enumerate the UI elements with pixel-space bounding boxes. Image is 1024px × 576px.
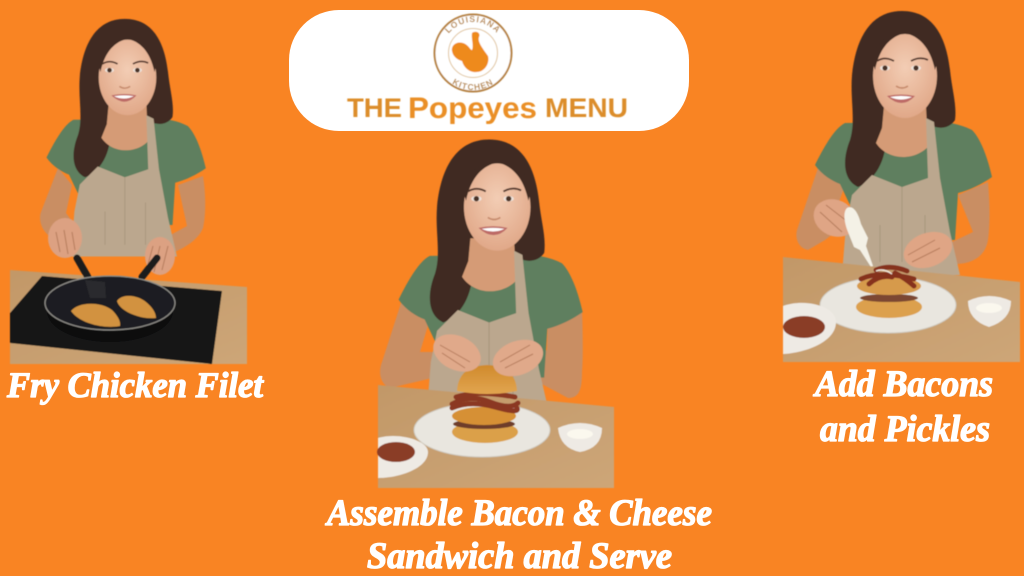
table bbox=[783, 257, 1020, 362]
plate bbox=[414, 403, 550, 457]
induction hob bbox=[10, 276, 222, 364]
logo title: MENU bbox=[545, 93, 628, 123]
burger bbox=[452, 365, 518, 443]
table bbox=[378, 385, 614, 488]
logo badge: KITCHEN bbox=[452, 78, 494, 91]
bacon bowl bbox=[783, 303, 836, 354]
caption: assemble sandwich: Assemble Bacon & Cheese bbox=[325, 493, 712, 534]
logo title: Popeyes bbox=[408, 92, 537, 125]
left arm bbox=[380, 300, 445, 388]
photo: woman frying chicken bbox=[10, 19, 247, 364]
face bbox=[464, 162, 530, 251]
left arm bbox=[796, 168, 845, 250]
sauce bowl bbox=[558, 423, 602, 452]
utensil handles bbox=[77, 258, 157, 293]
left arm bbox=[40, 168, 75, 250]
face bbox=[99, 39, 156, 115]
logo badge: LOUISIANA bbox=[444, 15, 500, 34]
torso and apron bbox=[399, 139, 583, 414]
hands bbox=[427, 327, 548, 383]
spatula bbox=[85, 280, 106, 298]
logo title bbox=[347, 92, 628, 125]
bacon bowl bbox=[377, 436, 428, 478]
caption: add bacons and pickles bbox=[813, 364, 993, 450]
logo panel bbox=[289, 10, 689, 131]
worktop bbox=[10, 270, 247, 364]
sauce bowl bbox=[968, 296, 1011, 327]
right arm bbox=[525, 308, 583, 398]
hands bbox=[48, 218, 175, 275]
logo title: THE bbox=[347, 93, 402, 123]
right arm bbox=[950, 182, 990, 264]
caption: add bacons and pickles: and Pickles bbox=[820, 409, 990, 450]
frying pan bbox=[47, 280, 173, 342]
torso and apron bbox=[815, 11, 992, 275]
caption: assemble sandwich: Sandwich and Serve bbox=[367, 536, 672, 576]
photo: woman adding bacon bbox=[783, 11, 1020, 362]
caption: add bacons and pickles: Add Bacons bbox=[813, 364, 993, 405]
right arm bbox=[165, 176, 205, 254]
torso and apron bbox=[47, 19, 206, 257]
hands bbox=[807, 192, 957, 275]
plate bbox=[820, 277, 956, 333]
caption: fry chicken filet: Fry Chicken Filet bbox=[6, 365, 264, 405]
burger with bacon bbox=[856, 267, 922, 318]
photo: woman assembling sandwich bbox=[377, 139, 614, 488]
logo badge bbox=[432, 12, 514, 94]
face bbox=[873, 33, 937, 118]
caption: assemble sandwich bbox=[325, 493, 712, 576]
chicken filets bbox=[71, 296, 156, 327]
squeeze bottle bbox=[844, 207, 873, 267]
